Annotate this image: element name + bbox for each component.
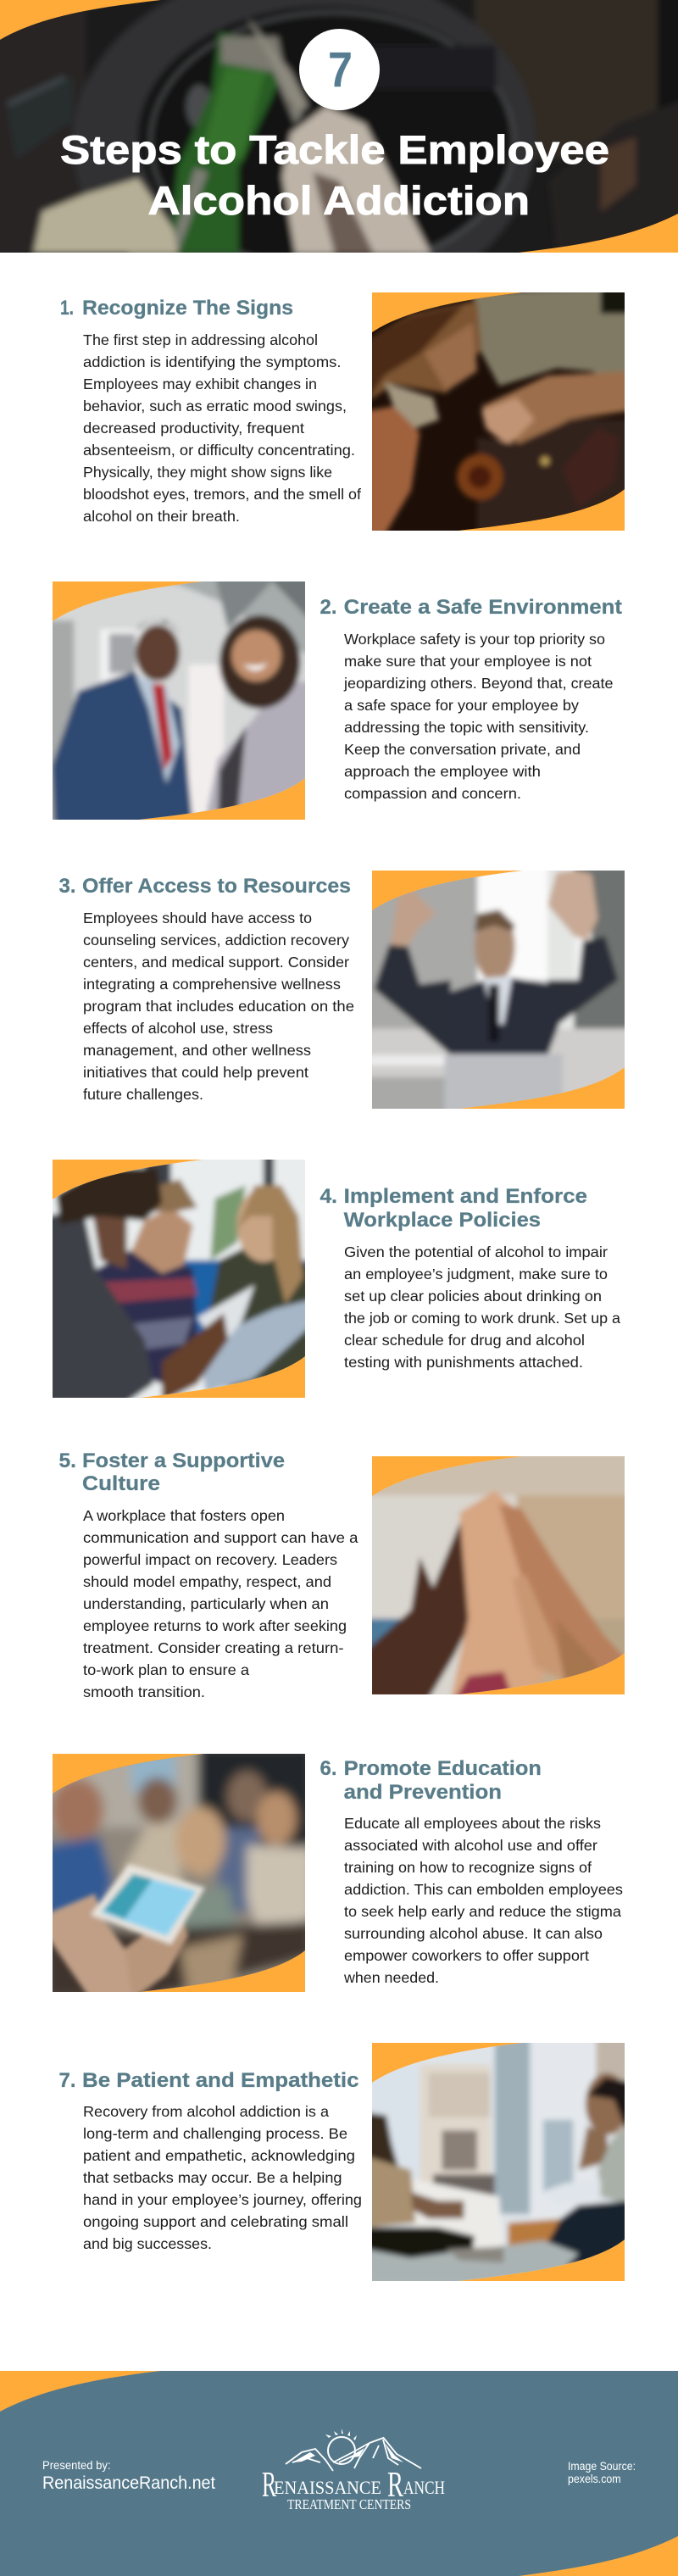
text block: step 3: effects of alcohol use, stress <box>83 1020 273 1037</box>
photo: cheering businessman at laptop <box>367 865 630 1113</box>
panel: step 5 <box>59 1449 630 1700</box>
heading: step 3: Offer Access to Resources <box>82 875 351 898</box>
text block: step 2: approach the employee with <box>344 763 541 780</box>
footer panel <box>0 2371 678 2576</box>
text block: step 5: should model empathy, respect, and <box>83 1573 331 1590</box>
text block: step 1: Physically, they might show signs like <box>83 464 332 481</box>
logo: Renaissance Ranch Treatment Centers <box>262 2429 445 2512</box>
image source credit <box>568 2460 636 2485</box>
text block: step 6: when needed. <box>343 1969 439 1986</box>
photo: counselling session in a living room <box>367 2038 630 2285</box>
text block: step 6: empower coworkers to offer support <box>344 1947 589 1964</box>
text block: step 5 <box>83 1507 358 1700</box>
text block: step 6: to seek help early and reduce the stigma <box>344 1903 621 1920</box>
text block: step 2 <box>343 631 614 802</box>
text block: step 4: set up clear policies about drinking on <box>344 1288 602 1305</box>
header banner <box>0 0 678 253</box>
text block: step 5: smooth transition. <box>83 1683 205 1700</box>
image source credit: pexels.com <box>568 2473 621 2485</box>
heading: step 5 <box>59 1449 285 1495</box>
heading: step 1: Recognize The Signs <box>82 297 293 320</box>
text block: step 2: compassion and concern. <box>344 785 521 802</box>
logo: Renaissance Ranch Treatment Centers: TREATMENT CENTERS <box>287 2496 411 2512</box>
presenter credit: RenaissanceRanch.net <box>42 2473 215 2493</box>
text block: step 1: bloodshot eyes, tremors, and the smell of <box>83 486 361 503</box>
text block: step 2: make sure that your employee is not <box>344 653 592 670</box>
text block: step 5: communication and support can have a <box>83 1529 358 1546</box>
heading: step 7: Be Patient and Empathetic <box>82 2069 359 2092</box>
text block: step 7: ongoing support and celebrating small <box>83 2213 348 2230</box>
text block: step 1: absenteeism, or difficulty concentrating. <box>83 442 355 459</box>
text block: step 5: understanding, particularly when an <box>83 1595 329 1612</box>
text block: step 3: integrating a comprehensive wellness <box>83 976 341 993</box>
text block: step 7: Recovery from alcohol addiction is a <box>83 2103 329 2120</box>
text block: step 3: Employees should have access to <box>83 910 312 926</box>
text block: step 4: clear schedule for drug and alcohol <box>344 1332 585 1349</box>
logo: Renaissance Ranch Treatment Centers: R <box>387 2466 403 2505</box>
text block: step 2: a safe space for your employee by <box>344 697 579 714</box>
heading: step 6: 6. <box>320 1757 337 1780</box>
text block: step 2: jeopardizing others. Beyond that, create <box>343 675 614 692</box>
panel: step 7 <box>59 2038 630 2285</box>
number badge: 7 <box>328 42 353 97</box>
photo: hands joined in a high five <box>367 1451 630 1699</box>
panel: step 6 <box>44 1747 623 2000</box>
heading: step 5: Culture <box>82 1472 160 1495</box>
presenter credit: Presented by: <box>42 2458 111 2472</box>
text block: step 7: hand in your employee’s journey, offering <box>83 2191 362 2208</box>
panel: step 3 <box>59 865 630 1113</box>
heading: step 6 <box>320 1757 542 1804</box>
text block: step 2: Keep the conversation private, and <box>344 741 581 758</box>
text block: step 1: behavior, such as erratic mood swings, <box>83 398 347 414</box>
text block: step 3: program that includes education on the <box>83 998 354 1015</box>
text block: step 6: training on how to recognize signs of <box>344 1859 592 1876</box>
text block: step 3: initiatives that could help prevent <box>83 1064 308 1081</box>
photo: presenter holding a tablet to a group <box>53 1754 305 1992</box>
text block: step 7: long-term and challenging process. Be <box>83 2125 347 2142</box>
text block: step 1 <box>83 331 361 525</box>
photo: man slumped over bar with whiskey <box>367 287 630 535</box>
text block: step 1: The first step in addressing alcohol <box>83 331 318 348</box>
photo: colleagues reviewing a laptop <box>47 1154 310 1402</box>
title: Alcohol Addiction <box>147 178 530 223</box>
logo: Renaissance Ranch Treatment Centers: ANCH <box>403 2477 445 2498</box>
text block: step 1: Employees may exhibit changes in <box>83 376 317 392</box>
text block: step 6: addiction. This can embolden employees <box>344 1881 623 1898</box>
text block: step 6: associated with alcohol use and offer <box>344 1837 597 1854</box>
text block: step 1: decreased productivity, frequent <box>83 420 304 437</box>
text block: step 3: counseling services, addiction recovery <box>83 932 349 949</box>
text block: step 3: future challenges. <box>83 1086 203 1103</box>
text block: step 7: that setbacks may occur. Be a helping <box>83 2169 342 2186</box>
panel: step 4 <box>47 1154 620 1402</box>
text block: step 4: testing with punishments attached. <box>344 1354 583 1371</box>
text block: step 3 <box>83 910 354 1103</box>
title: Steps to Tackle Employee <box>60 127 609 172</box>
heading: step 6: and Prevention <box>344 1781 502 1804</box>
panel: step 2 <box>47 576 622 824</box>
title <box>60 127 609 223</box>
text block: step 4: Given the potential of alcohol to impair <box>344 1243 608 1260</box>
logo: Renaissance Ranch Treatment Centers: R <box>262 2466 276 2505</box>
image source credit: Image Source: <box>568 2460 636 2473</box>
heading: step 7: 7. <box>59 2069 76 2092</box>
text block: step 7: and big successes. <box>83 2235 212 2252</box>
heading: step 4: 4. <box>320 1185 337 1208</box>
text block: step 5: powerful impact on recovery. Leaders <box>83 1551 337 1568</box>
text block: step 3: centers, and medical support. Consider <box>83 954 349 971</box>
text block: step 2: addressing the topic with sensitivity. <box>344 719 589 736</box>
number badge <box>299 29 380 110</box>
text block: step 2: Workplace safety is your top priority so <box>344 631 605 648</box>
heading: step 3: 3. <box>59 875 76 898</box>
text block: step 5: employee returns to work after seeking <box>83 1617 347 1634</box>
heading: step 6: Promote Education <box>344 1757 542 1780</box>
panel: step 1 <box>60 287 630 535</box>
text block: step 7: patient and empathetic, acknowledging <box>83 2147 355 2164</box>
text block: step 6 <box>343 1815 623 1986</box>
text block: step 5: A workplace that fosters open <box>83 1507 285 1524</box>
heading: step 4: Workplace Policies <box>344 1209 541 1232</box>
heading: step 5: 5. <box>59 1449 76 1472</box>
text block: step 1: alcohol on their breath. <box>83 508 240 525</box>
heading: step 4 <box>320 1185 587 1232</box>
text block: step 4 <box>344 1243 620 1371</box>
heading: step 2: 2. <box>320 596 337 619</box>
text block: step 5: to-work plan to ensure a <box>83 1661 249 1678</box>
header photo: bottle opened at steering wheel <box>0 0 678 253</box>
text block: step 7 <box>83 2103 362 2252</box>
text block: step 6: Educate all employees about the risks <box>344 1815 601 1832</box>
text block: step 1: addiction is identifying the symptoms. <box>83 353 341 370</box>
text block: step 4: an employee’s judgment, make sure to <box>344 1266 608 1282</box>
heading: step 1: 1. <box>60 297 74 320</box>
heading: step 5: Foster a Supportive <box>82 1449 285 1472</box>
presenter credit <box>42 2458 215 2493</box>
logo: Renaissance Ranch Treatment Centers: ENAISSANCE <box>274 2477 381 2498</box>
heading: step 4: Implement and Enforce <box>344 1185 587 1208</box>
text block: step 4: the job or coming to work drunk. Set up a <box>344 1310 620 1327</box>
text block: step 3: management, and other wellness <box>83 1042 311 1059</box>
heading: step 2: Create a Safe Environment <box>344 596 622 619</box>
photo: two smiling business people <box>47 576 310 824</box>
text block: step 6: surrounding alcohol abuse. It can also <box>344 1925 603 1942</box>
text block: step 5: treatment. Consider creating a return- <box>83 1639 344 1656</box>
